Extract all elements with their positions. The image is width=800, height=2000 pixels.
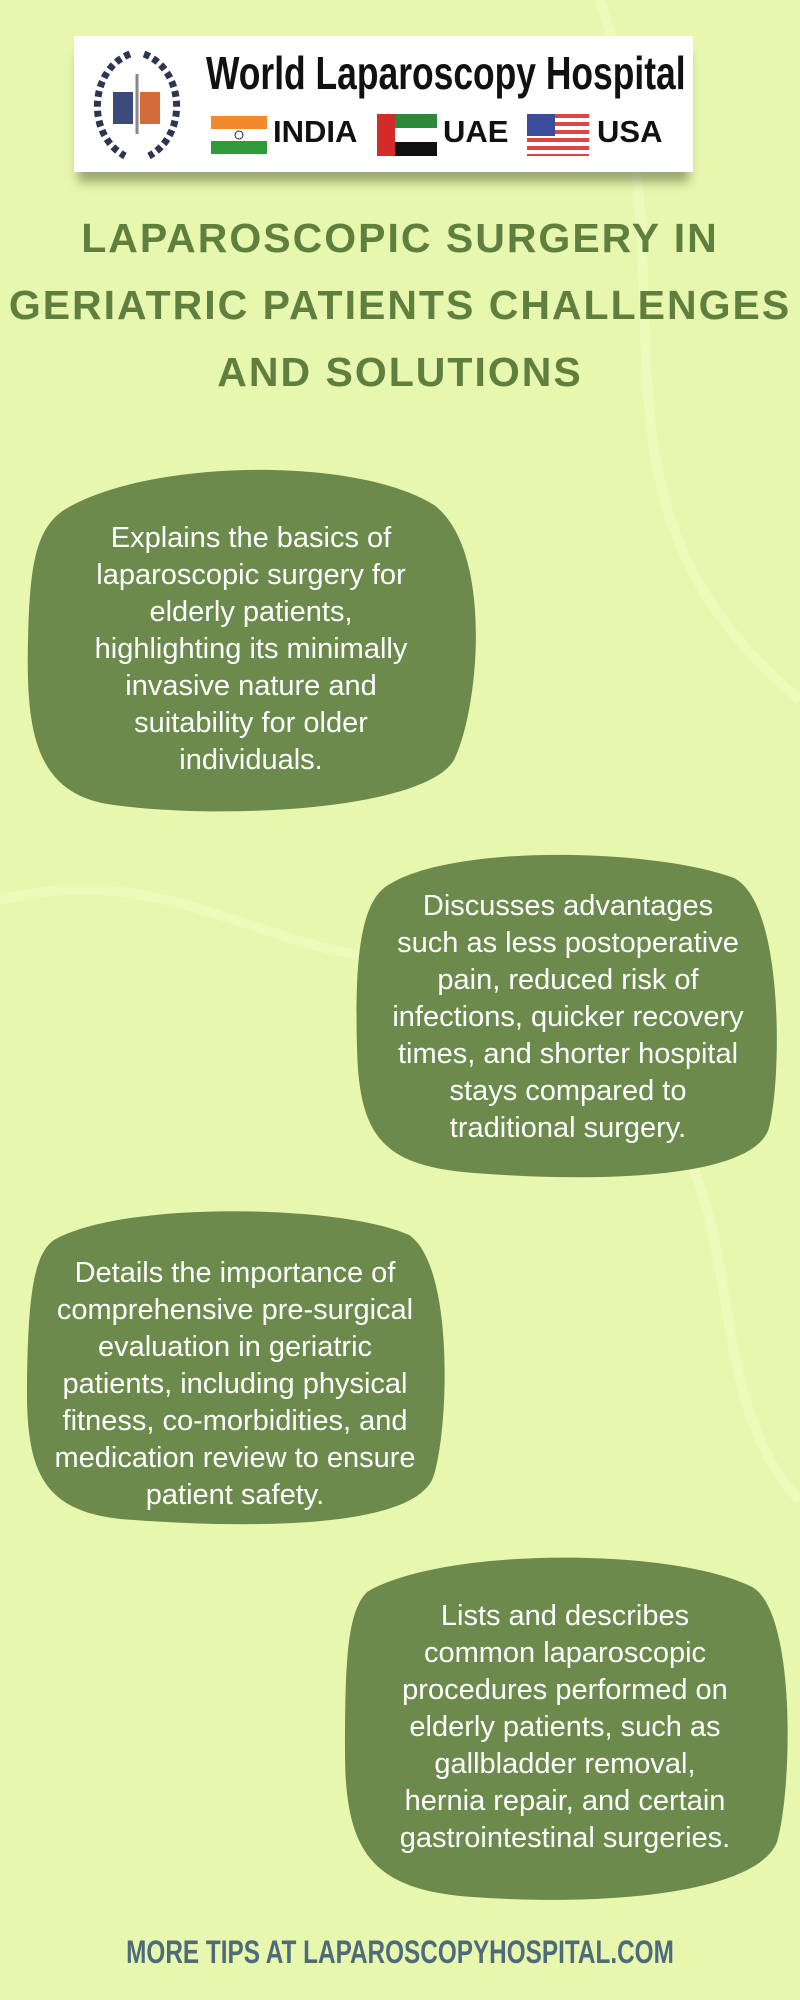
text block: patients, including physical xyxy=(63,1368,407,1400)
text block: invasive nature and xyxy=(125,670,377,702)
text block: elderly patients, xyxy=(149,596,353,628)
text block: Lists and describes xyxy=(441,1600,689,1632)
text block: highlighting its minimally xyxy=(95,633,407,665)
text block: Details the importance of xyxy=(75,1257,395,1289)
title: AND SOLUTIONS xyxy=(217,349,583,395)
text block: laparoscopic surgery for xyxy=(96,559,406,591)
flags row: UAE xyxy=(443,114,508,149)
text block: times, and shorter hospital xyxy=(398,1038,738,1070)
panel: basics xyxy=(28,470,476,812)
text block: individuals. xyxy=(179,744,323,776)
title: GERIATRIC PATIENTS CHALLENGES xyxy=(9,282,791,328)
logo text: World Laparoscopy Hospital xyxy=(206,47,686,99)
text block: patient safety. xyxy=(146,1479,324,1511)
text block xyxy=(54,1257,416,1511)
text block: common laparoscopic xyxy=(424,1637,706,1669)
text block: infections, quicker recovery xyxy=(392,1001,744,1033)
text block: evaluation in geriatric xyxy=(98,1331,372,1363)
text block xyxy=(392,890,744,1144)
text block: gastrointestinal surgeries. xyxy=(400,1822,730,1854)
flags row: USA xyxy=(597,114,662,149)
text block xyxy=(95,522,408,776)
text block xyxy=(400,1600,730,1854)
text block: Discusses advantages xyxy=(423,890,713,922)
icon: wreath emblem xyxy=(94,50,180,160)
text block: gallbladder removal, xyxy=(434,1748,696,1780)
flags row: INDIA xyxy=(273,114,357,149)
panel: evaluation xyxy=(26,1211,445,1524)
panel: procedures xyxy=(344,1558,788,1900)
text block: procedures performed on xyxy=(402,1674,728,1706)
text block: stays compared to xyxy=(450,1075,686,1107)
flags row xyxy=(211,114,662,156)
text block: suitability for older xyxy=(134,707,368,739)
text block: pain, reduced risk of xyxy=(437,964,699,996)
text block: medication review to ensure xyxy=(54,1442,416,1474)
footer: MORE TIPS AT LAPAROSCOPYHOSPITAL.COM xyxy=(126,1934,674,1970)
text block: elderly patients, such as xyxy=(409,1711,721,1743)
text block: hernia repair, and certain xyxy=(405,1785,725,1817)
panel: advantages xyxy=(356,854,777,1178)
text block: fitness, co-morbidities, and xyxy=(63,1405,407,1437)
text block: comprehensive pre-surgical xyxy=(57,1294,413,1326)
title xyxy=(9,215,791,395)
text block: such as less postoperative xyxy=(397,927,739,959)
logo xyxy=(74,36,693,172)
text block: traditional surgery. xyxy=(450,1112,686,1144)
title: LAPAROSCOPIC SURGERY IN xyxy=(81,215,719,261)
text block: Explains the basics of xyxy=(111,522,391,554)
